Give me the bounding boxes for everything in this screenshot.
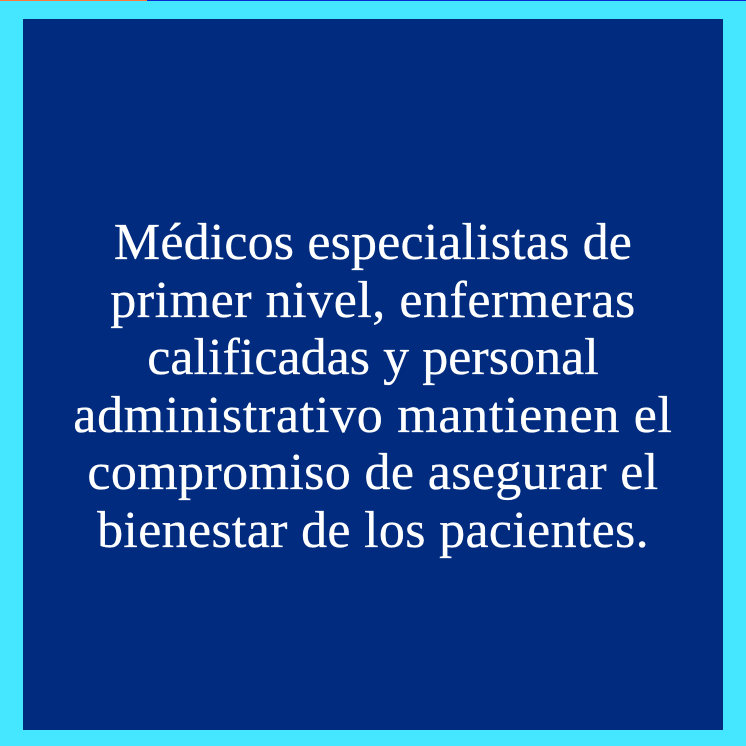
text block: main message: primer nivel, enfermeras (110, 272, 636, 329)
text block: main message: administrativo mantienen el (73, 387, 673, 444)
text block: main message: compromiso de asegurar el (87, 444, 659, 501)
text block: main message (73, 214, 673, 559)
top strip: blue segment (147, 0, 746, 1)
text block: main message: bienestar de los pacientes. (97, 502, 649, 559)
text block: main message: Médicos especialistas de (114, 214, 632, 271)
top strip: orange segment (0, 0, 147, 1)
text block: main message: calificadas y personal (147, 329, 599, 386)
